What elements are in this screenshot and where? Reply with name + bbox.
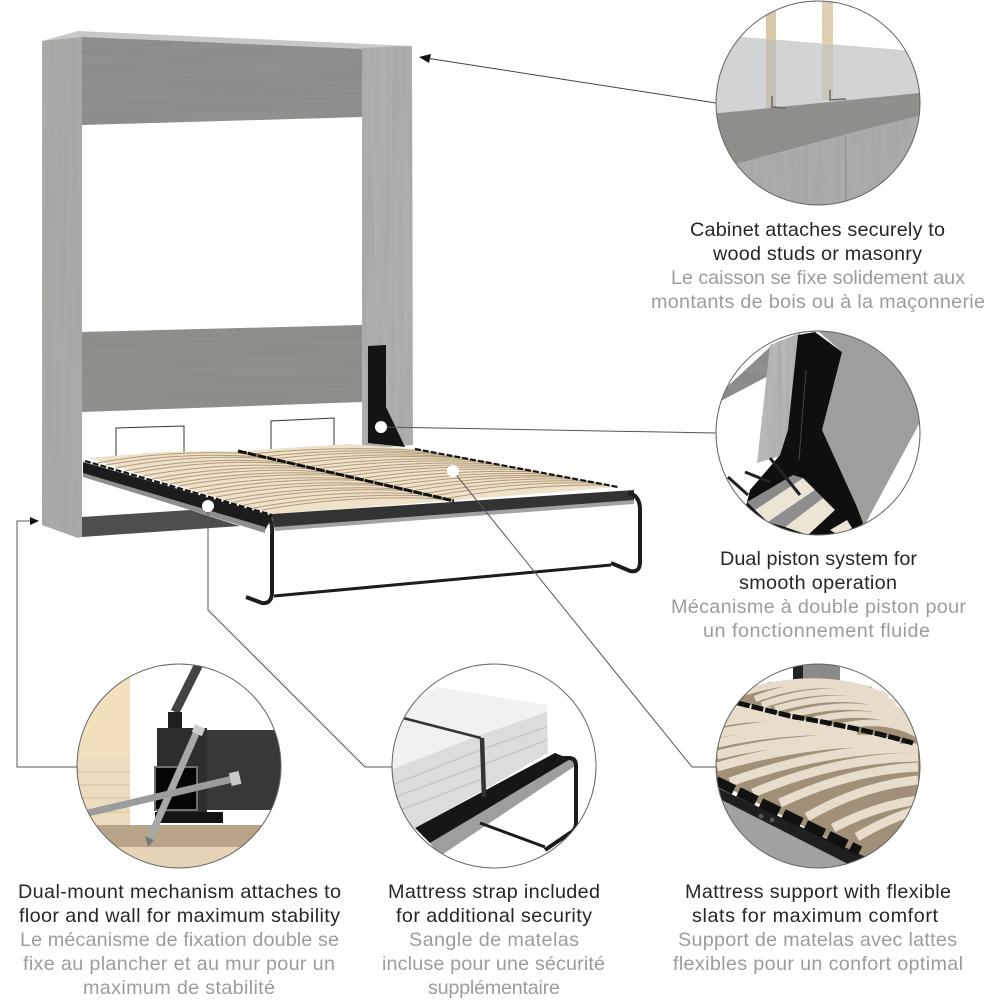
callout line: mount arrow — [17, 517, 77, 767]
text block: piston: Mécanisme à double piston pour — [671, 596, 966, 618]
text block: cabinet attachment: Cabinet attaches securely to — [690, 219, 945, 241]
text block: piston — [671, 548, 966, 642]
text block: dual mount: maximum de stabilité — [83, 977, 275, 999]
text block: dual mount: fixe au plancher et au mur pour un — [23, 953, 335, 975]
main illustration: wall bed — [42, 31, 640, 603]
circle detail: piston — [716, 330, 920, 536]
text block: dual mount — [18, 881, 341, 999]
text block: flexible slats: Mattress support with flexible — [685, 881, 951, 903]
text block: flexible slats: slats for maximum comfort — [692, 905, 938, 927]
text block: dual mount: Le mécanisme de fixation double se — [20, 929, 339, 951]
circle detail: mattress strap — [380, 664, 596, 868]
callout dot: piston — [375, 421, 387, 433]
text block: piston: Dual piston system for — [720, 548, 917, 570]
text block: mattress strap: Mattress strap included — [388, 881, 600, 903]
callout line: slats — [453, 471, 716, 767]
slat deck — [88, 444, 618, 514]
callout dot: rail — [202, 500, 214, 512]
cabinet right side panel — [362, 46, 413, 449]
callout line: top arrow — [419, 54, 716, 103]
text block: mattress strap: Sangle de matelas — [409, 929, 579, 951]
wire bracket right — [271, 418, 334, 449]
cabinet bottom rail — [82, 510, 240, 537]
piston bracket — [368, 345, 405, 447]
wire bracket left — [116, 426, 184, 457]
callout dot: slats — [447, 465, 459, 477]
rear leg — [611, 493, 640, 571]
callout line: strap — [208, 506, 392, 767]
text block: piston: un fonctionnement fluide — [703, 620, 930, 642]
text block: mattress strap: incluse pour une sécurité — [382, 953, 605, 975]
cabinet upper header panel — [82, 37, 362, 125]
bed frame front rail — [271, 490, 634, 529]
cabinet top surface — [42, 31, 412, 50]
bed frame left rail — [83, 462, 273, 530]
text block: dual mount: floor and wall for maximum stability — [19, 905, 340, 927]
text block: mattress strap: supplémentaire — [428, 977, 560, 999]
front leg — [246, 517, 272, 603]
bed frame left gray edge — [83, 473, 265, 533]
text block: mattress strap: for additional security — [396, 905, 592, 927]
circle detail: cabinet attachment — [716, 0, 920, 206]
text block: cabinet attachment — [651, 219, 985, 313]
text block: flexible slats — [673, 881, 963, 975]
cabinet left side panel — [42, 37, 82, 538]
circle detail: dual mount — [77, 664, 283, 871]
text block: cabinet attachment: Le caisson se fixe solidement aux — [671, 267, 965, 289]
bed frame front gray edge — [275, 500, 634, 531]
cabinet mid panel — [82, 325, 362, 412]
text block: piston: smooth operation — [739, 572, 897, 594]
text block: flexible slats: Support de matelas avec lattes — [678, 929, 957, 951]
text block: flexible slats: flexibles pour un confort optimal — [673, 953, 963, 975]
circle detail: flexible slats — [716, 664, 920, 868]
text block: dual mount: Dual-mount mechanism attaches to — [18, 881, 341, 903]
text block: mattress strap — [382, 881, 605, 999]
center slat strap — [238, 451, 454, 501]
text block: cabinet attachment: wood studs or masonry — [712, 243, 922, 265]
foot cross bar — [274, 565, 611, 596]
callout line: piston — [381, 427, 716, 433]
deck edge pads — [85, 449, 618, 515]
text block: cabinet attachment: montants de bois ou à la maçonnerie — [651, 291, 985, 313]
